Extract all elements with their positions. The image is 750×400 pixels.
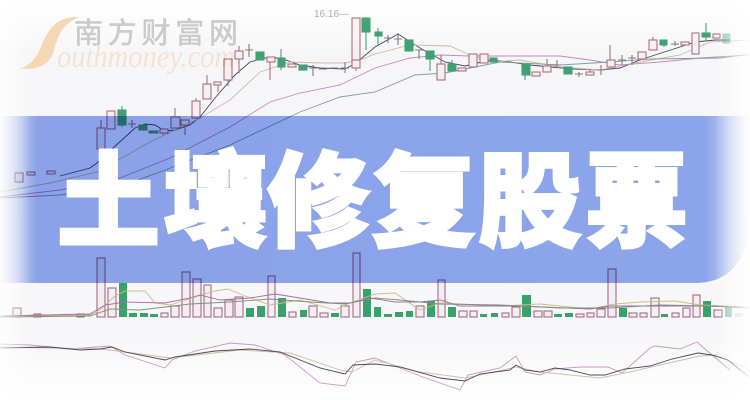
watermark: southmoney logo: outhmoney.com	[57, 38, 235, 74]
title: 复	[372, 119, 475, 268]
indicator lines	[0, 342, 750, 390]
title: 壤	[164, 119, 266, 268]
title: 票	[585, 119, 688, 268]
watermark: southmoney logo: 南方财富网	[74, 10, 238, 52]
green candles	[118, 18, 730, 133]
title	[57, 119, 688, 268]
title: 股	[478, 119, 582, 268]
watermark: southmoney logo	[19, 10, 238, 74]
small crosses	[128, 33, 679, 128]
side fades	[0, 0, 30, 400]
moving averages	[0, 34, 750, 198]
blue title band	[0, 116, 750, 283]
volume chart	[0, 253, 750, 317]
red candles	[15, 18, 720, 182]
price label: 16.16—	[314, 9, 349, 20]
volume green bars	[119, 283, 743, 317]
volume red bars	[13, 253, 722, 317]
title: 土	[57, 119, 160, 268]
candlestick chart	[0, 18, 750, 198]
title: 修	[267, 119, 370, 268]
volume moving averages	[0, 289, 750, 317]
